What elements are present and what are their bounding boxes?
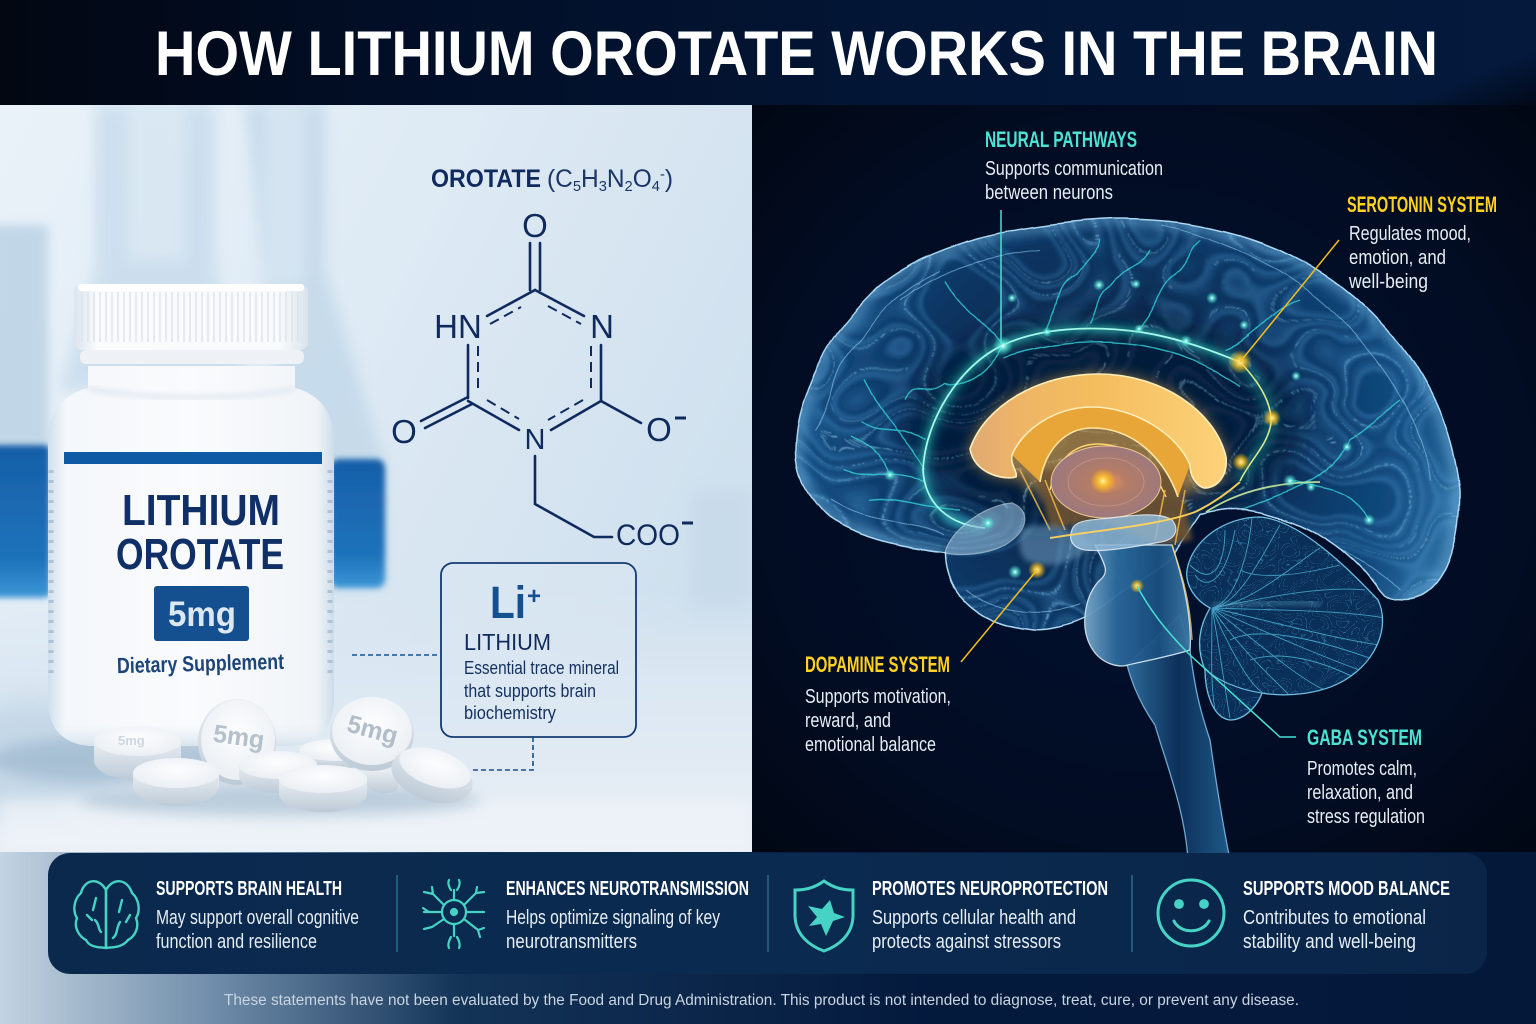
hippocampal region — [1019, 525, 1092, 565]
pills: 5mg — [344, 710, 401, 750]
benefit: neurotransmission: ENHANCES NEUROTRANSMISSION — [506, 878, 749, 900]
molecule heading: - — [660, 166, 665, 183]
benefit: brain health: SUPPORTS BRAIN HEALTH — [156, 878, 342, 900]
benefit: brain health: function and resilience — [156, 931, 317, 953]
callout: lithium box: LITHIUM — [464, 629, 551, 655]
rim glow — [796, 219, 1459, 600]
pills: 5mg — [211, 720, 266, 755]
callout: lithium box: that supports brain — [464, 681, 596, 701]
molecule heading: 5 — [573, 178, 581, 195]
icon: neuron — [423, 880, 484, 948]
pills: 5mg — [118, 733, 145, 748]
benefit: mood balance — [1158, 878, 1450, 953]
callout: GABA system: relaxation, and — [1307, 782, 1413, 804]
under-thalamus drape — [1035, 470, 1192, 545]
molecule: orotate structure: O — [391, 413, 417, 450]
benefit: brain health — [74, 878, 359, 953]
benefit: mood balance: stability and well-being — [1243, 931, 1416, 953]
molecule: orotate structure: HN — [434, 308, 482, 345]
neural pathway arc — [923, 328, 1271, 528]
header band — [0, 0, 1536, 105]
pills — [80, 697, 480, 816]
molecule: orotate structure: O — [646, 411, 672, 448]
callout: serotonin system — [1240, 192, 1497, 362]
glowing nodes — [884, 279, 1375, 593]
brain illustration — [790, 210, 1470, 860]
bottle: OROTATE — [116, 530, 284, 579]
icon: smile — [1158, 880, 1224, 946]
cerebellum — [1185, 515, 1390, 725]
molecule heading: (C — [547, 165, 573, 193]
molecule: orotate structure: N — [590, 308, 614, 345]
callout: neural pathways: NEURAL PATHWAYS — [985, 127, 1137, 152]
molecule heading: N — [607, 165, 625, 193]
panel: left laboratory background — [0, 105, 752, 852]
brainstem and pons — [1050, 482, 1320, 666]
callout: dopamine system: reward, and — [805, 710, 891, 732]
callout: GABA system — [1137, 586, 1425, 828]
label stripe — [64, 452, 322, 464]
icon: brain — [74, 881, 139, 948]
panel: bottom background strip — [0, 852, 1536, 1024]
callout: dopamine system: Supports motivation, — [805, 686, 951, 708]
benefit: mood balance: Contributes to emotional — [1243, 907, 1426, 929]
connector: pills to lithium box — [472, 737, 533, 770]
thalamus — [1051, 446, 1161, 518]
molecule heading: 2 — [625, 178, 633, 195]
gyri lobes texture — [790, 210, 1470, 640]
callout: GABA system: Promotes calm, — [1307, 758, 1417, 780]
callout: serotonin system: well-being — [1348, 271, 1428, 293]
callout: lithium box — [441, 563, 636, 737]
panel: right brain background — [752, 105, 1536, 852]
benefit: neuroprotection — [795, 878, 1108, 953]
glowing limbic bands — [970, 374, 1226, 545]
callout: lithium box: Essential trace mineral — [464, 658, 619, 678]
benefit: neurotransmission — [423, 878, 749, 953]
molecule heading — [431, 165, 673, 195]
disclaimer: These statements have not been evaluated by the Food and Drug Administration. This product is not intended to diagnose, treat, cure, or prevent any disease. — [224, 992, 1299, 1009]
dietary supplement: Dietary Supplement — [117, 649, 285, 678]
molecule: orotate structure: COO — [616, 519, 680, 552]
molecule heading: ) — [665, 165, 673, 193]
molecule heading: 3 — [599, 178, 607, 195]
dose badge — [154, 586, 249, 641]
callout: lithium box: Li — [490, 577, 526, 628]
bottle cap — [74, 284, 308, 364]
glowing neural branches — [845, 240, 1400, 520]
benefit: neuroprotection: Supports cellular health and — [872, 907, 1076, 929]
callout: serotonin system: emotion, and — [1349, 247, 1446, 269]
frontal temporal oval — [945, 503, 1025, 554]
benefit: neuroprotection: protects against stressors — [872, 931, 1061, 953]
callout: neural pathways: between neurons — [985, 182, 1113, 204]
callout: lithium box: + — [527, 583, 541, 610]
gyri fold lines — [790, 210, 1470, 640]
bottle — [0, 284, 334, 784]
molecule heading: O — [633, 165, 652, 193]
callout: dopamine system: emotional balance — [805, 734, 936, 756]
benefit: brain health: May support overall cognitive — [156, 907, 359, 929]
callout: lithium box: biochemistry — [464, 703, 556, 723]
benefit: neuroprotection: PROMOTES NEUROPROTECTION — [872, 878, 1108, 900]
benefit: neurotransmission: Helps optimize signaling of key — [506, 907, 720, 929]
callout: dopamine system — [805, 570, 1037, 756]
callout: serotonin system: Regulates mood, — [1349, 223, 1471, 245]
molecule: orotate structure — [391, 207, 693, 552]
molecule: orotate structure: O — [522, 207, 548, 244]
callout: neural pathways: Supports communication — [985, 158, 1163, 180]
callout: dopamine system: DOPAMINE SYSTEM — [805, 652, 950, 677]
panel: benefits bar — [48, 853, 1487, 974]
cerebrum — [790, 210, 1470, 640]
inner shadow around limbic — [910, 317, 1300, 533]
molecule: orotate structure: N — [525, 424, 545, 456]
molecule heading: 4 — [652, 178, 660, 195]
callout: neural pathways — [985, 127, 1163, 345]
benefit: neurotransmission: neurotransmitters — [506, 931, 637, 953]
callout: GABA system: GABA SYSTEM — [1307, 725, 1422, 750]
icon: shield — [795, 881, 853, 951]
dose badge: 5mg — [168, 595, 236, 634]
product name: LITHIUM — [122, 486, 280, 535]
callout: GABA system: stress regulation — [1307, 806, 1425, 828]
molecule heading: H — [581, 165, 599, 193]
spinal cord — [1127, 615, 1230, 860]
molecule heading: OROTATE — [431, 165, 541, 193]
connector: bottle to lithium box — [352, 654, 441, 656]
benefit: mood balance: SUPPORTS MOOD BALANCE — [1243, 878, 1450, 900]
hand-drawn sulci — [815, 225, 1430, 612]
